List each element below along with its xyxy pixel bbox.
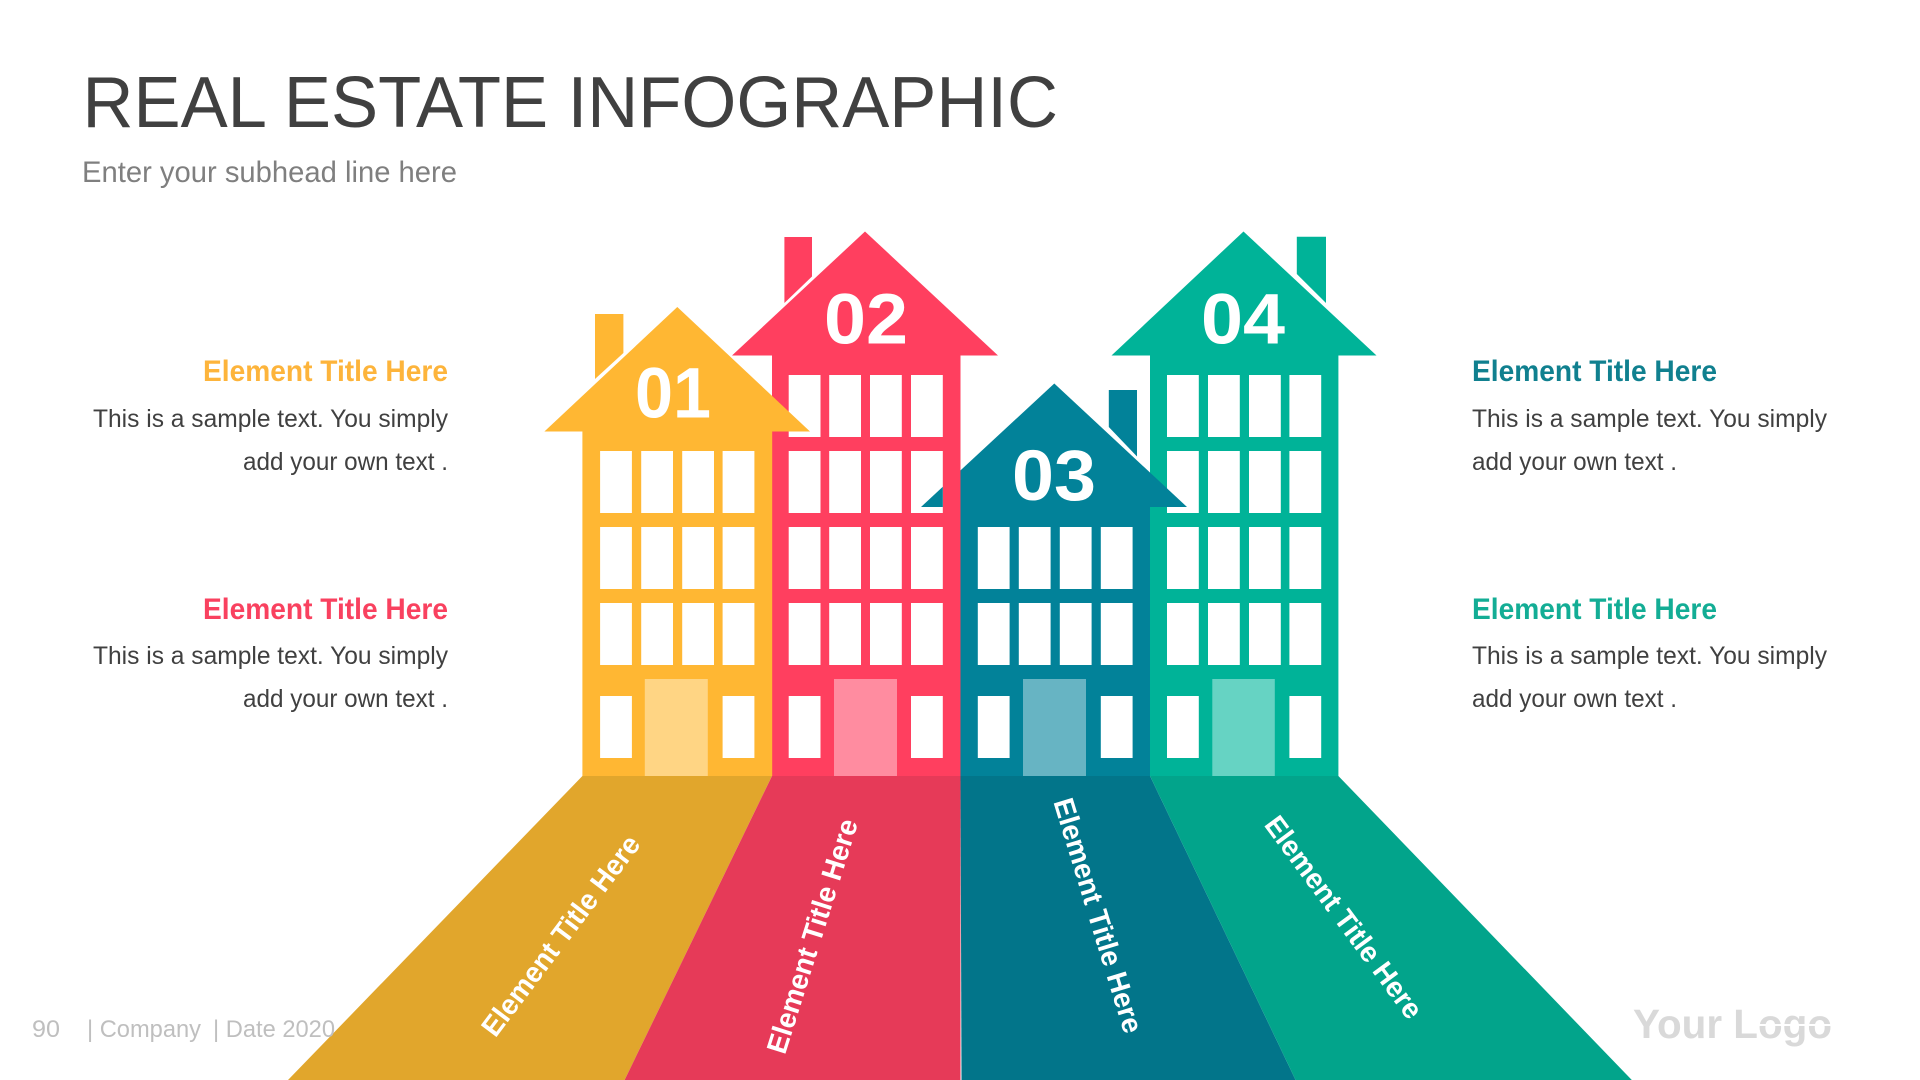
footer xyxy=(32,1016,335,1043)
chimney xyxy=(784,237,812,303)
windows xyxy=(600,451,754,758)
door xyxy=(1023,679,1086,776)
text block: bottom right xyxy=(1472,593,1827,713)
text block: top right xyxy=(1472,355,1827,476)
text block: top left xyxy=(93,355,448,476)
road 01 xyxy=(288,776,772,1080)
heading: Element Title Here xyxy=(203,593,448,626)
subhead: Enter your subhead line here xyxy=(82,156,457,189)
body text line 2: add your own text . xyxy=(1472,448,1677,476)
roof 03 corner seen through window xyxy=(921,487,943,507)
text block: bottom left xyxy=(93,593,448,713)
heading: Element Title Here xyxy=(1472,593,1717,626)
roof xyxy=(732,232,998,356)
number: 03 xyxy=(1012,437,1096,516)
door xyxy=(834,679,897,776)
windows xyxy=(789,375,943,758)
road label 03: Element Title Here xyxy=(1047,794,1149,1037)
body text: This is a sample text. You simply xyxy=(93,405,448,433)
road label 04: Element Title Here xyxy=(1258,810,1429,1025)
building 01 xyxy=(544,307,810,776)
body xyxy=(1150,355,1338,776)
body text line 2: add your own text . xyxy=(243,448,448,476)
number: 02 xyxy=(824,280,908,360)
chimney xyxy=(595,314,623,379)
body xyxy=(960,507,1150,776)
body text line 2: add your own text . xyxy=(1472,685,1677,713)
road label 01: Element Title Here xyxy=(475,829,647,1043)
page number: 90 xyxy=(32,1016,60,1043)
road label 02: Element Title Here xyxy=(761,815,865,1057)
roof xyxy=(1112,232,1376,356)
road 02 xyxy=(625,776,960,1080)
body text line 2: add your own text . xyxy=(243,685,448,713)
body xyxy=(772,355,960,776)
number: 04 xyxy=(1201,280,1286,360)
road 03 xyxy=(960,776,1296,1080)
chimney xyxy=(1297,237,1326,303)
heading: Element Title Here xyxy=(203,355,448,388)
road 04 xyxy=(1150,776,1632,1080)
company: | Company xyxy=(87,1016,201,1043)
door xyxy=(1212,679,1275,776)
body text: This is a sample text. You simply xyxy=(1472,405,1827,433)
heading: Element Title Here xyxy=(1472,355,1717,388)
door xyxy=(645,679,708,776)
building 04 xyxy=(1112,232,1376,776)
date: | Date 2020 xyxy=(213,1016,335,1043)
chimney xyxy=(1109,390,1137,456)
logo: Your Logo xyxy=(1633,1001,1832,1047)
body xyxy=(582,431,772,776)
title: REAL ESTATE INFOGRAPHIC xyxy=(82,63,1058,143)
body text: This is a sample text. You simply xyxy=(1472,642,1827,670)
roof xyxy=(544,307,810,432)
windows xyxy=(1167,375,1321,758)
windows xyxy=(978,527,1133,758)
body text: This is a sample text. You simply xyxy=(93,642,448,670)
building 02 xyxy=(732,232,998,776)
roof xyxy=(921,384,1187,507)
building 03 xyxy=(921,384,1187,776)
number: 01 xyxy=(635,354,711,434)
